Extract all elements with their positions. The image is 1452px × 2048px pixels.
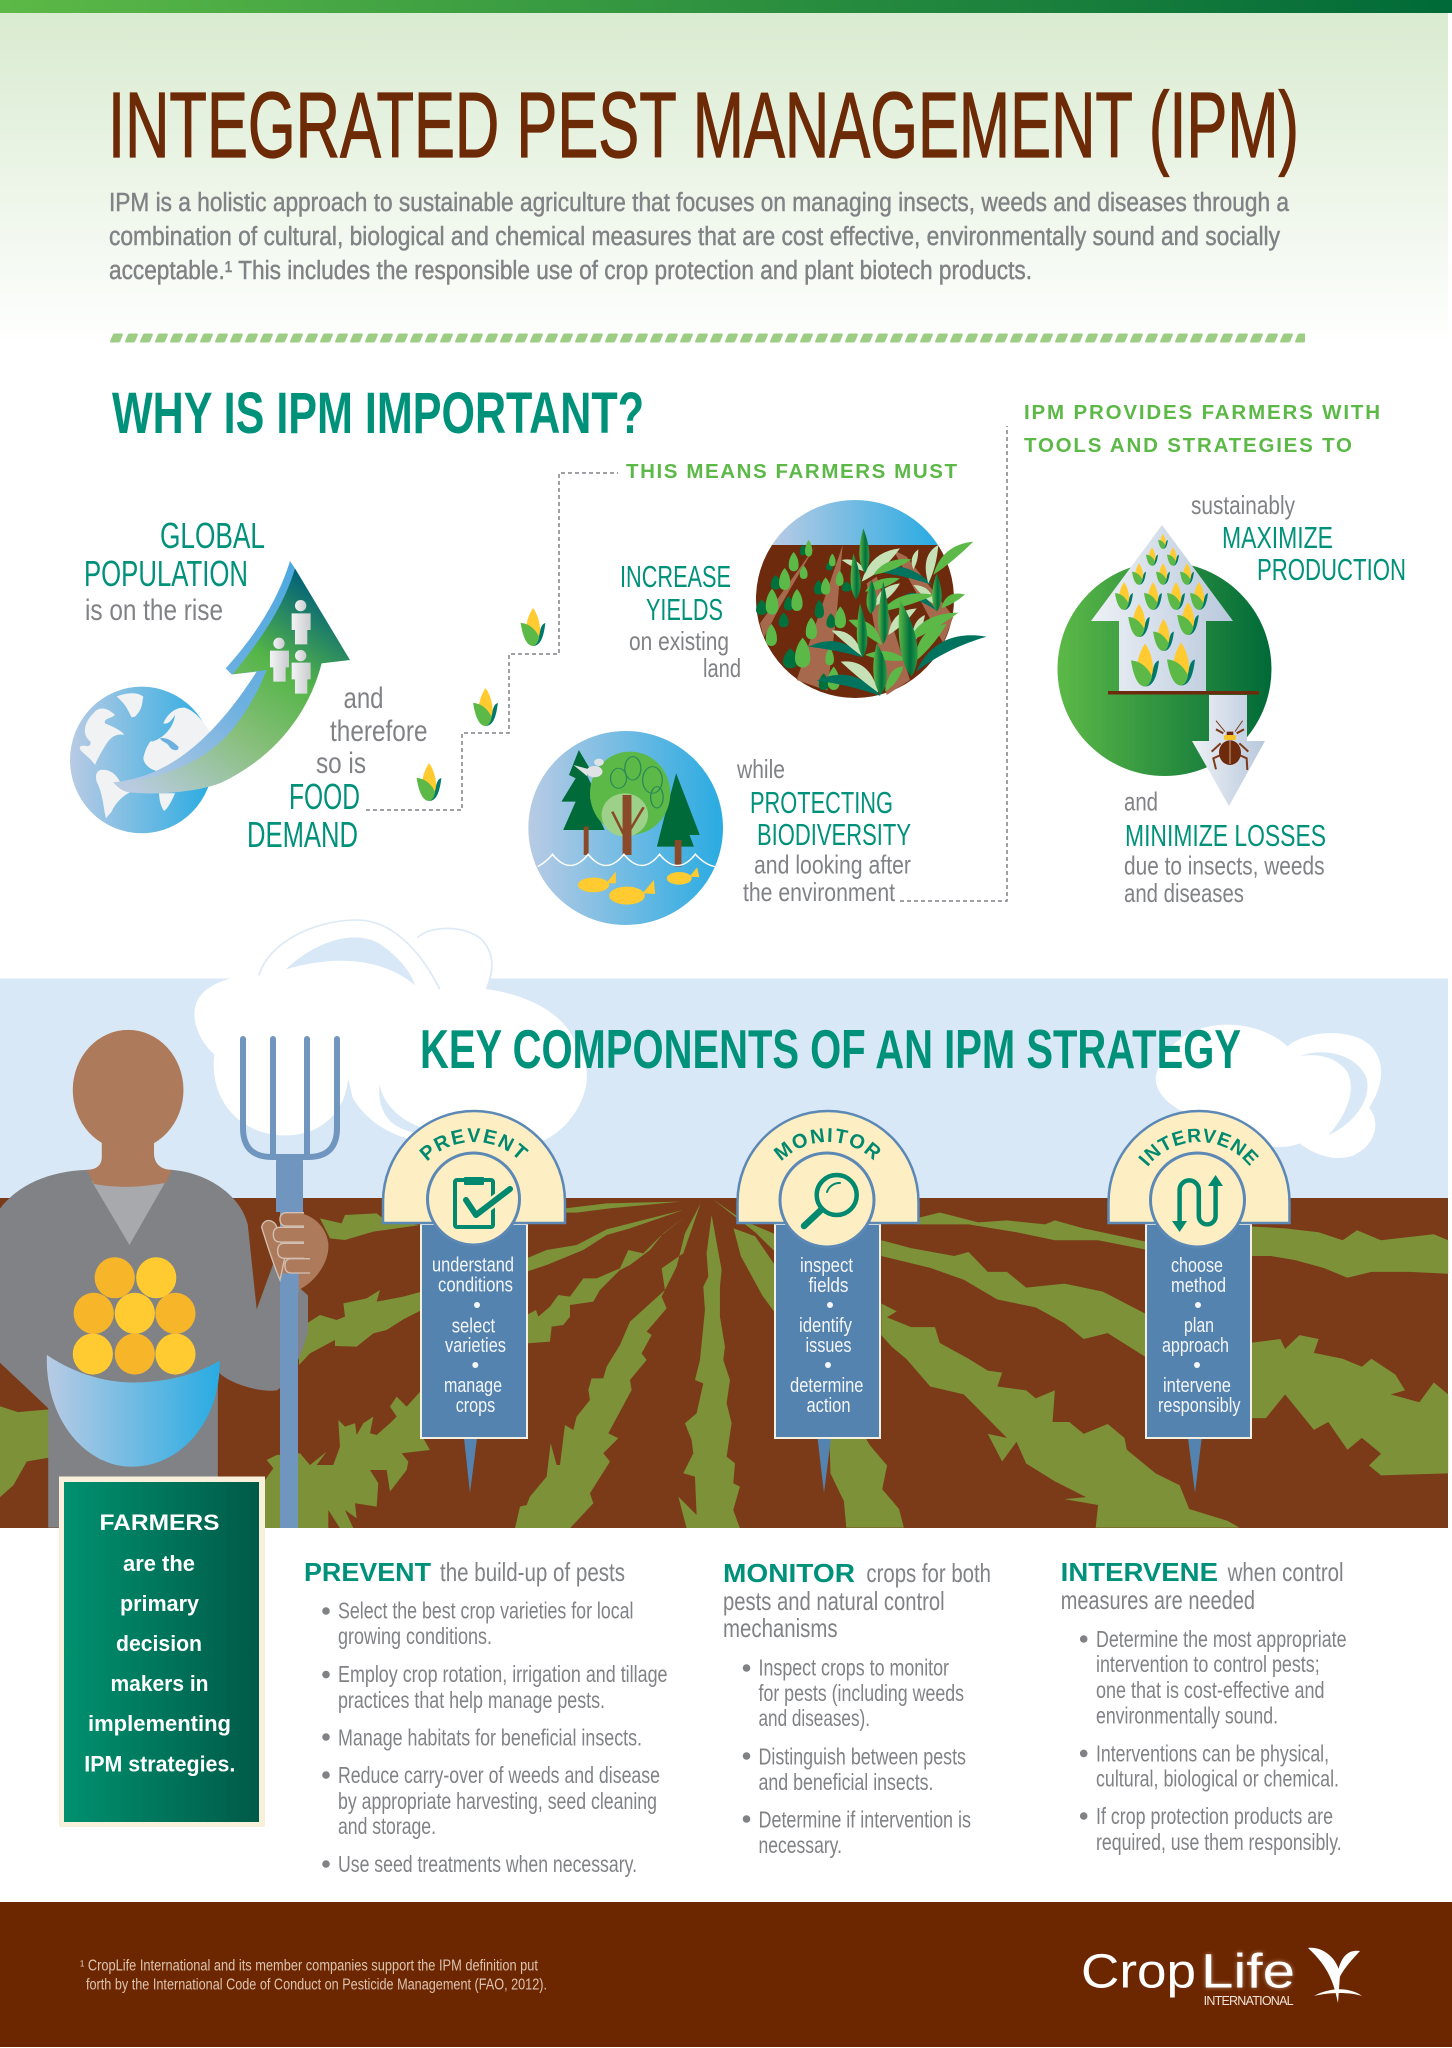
sign text prevent: varieties [445, 1335, 506, 1357]
intro text: IPM is a holistic approach to sustainable agriculture that focuses on managing insects, weeds and diseases through a [109, 189, 1290, 217]
icon: magnifier [804, 1175, 857, 1226]
column: prevent: the build-up of pests [440, 1557, 625, 1587]
heading: IPM provides farmers [1024, 401, 1380, 457]
sign label prevent: PREVENT [419, 1128, 529, 1161]
column: intervene: when control [1227, 1557, 1344, 1587]
sign text prevent: manage [444, 1375, 502, 1397]
dashed stair connector [366, 473, 618, 810]
text: food demand: DEMAND [247, 814, 358, 855]
logo: CropLife International: Life [1201, 1946, 1295, 1999]
intro text [109, 189, 1290, 285]
column: monitor: MONITOR [723, 1558, 855, 1588]
icon: up and down arrows [1172, 1175, 1223, 1232]
column: prevent: practices that help manage pests. [338, 1687, 605, 1713]
column: monitor: and beneficial insects. [758, 1769, 934, 1795]
sign text prevent: understand [432, 1255, 514, 1277]
callout: farmers box: primary [120, 1591, 200, 1616]
column: monitor: Distinguish between pests [758, 1744, 966, 1770]
intro text: acceptable.¹ This includes the responsible use of crop protection and plant biotech products. [109, 257, 1032, 285]
sign text intervene: intervene [1163, 1375, 1231, 1397]
icon: corn 2 [473, 688, 498, 726]
sky band [0, 978, 1448, 1198]
text: protecting biodiversity: the environment [743, 877, 896, 907]
sign text intervene: approach [1162, 1335, 1229, 1357]
icon: farmer hand [262, 1212, 328, 1293]
column: monitor: Inspect crops to monitor [758, 1654, 949, 1680]
farmer figure [0, 1030, 337, 1528]
icon: beetle [1212, 721, 1248, 770]
callout: farmers box: makers in [110, 1671, 208, 1696]
text: minimize losses: and diseases [1124, 878, 1244, 908]
text: protecting biodiversity: BIODIVERSITY [757, 817, 911, 852]
column: intervene: required, use them responsibly. [1096, 1829, 1342, 1855]
column: monitor: necessary. [758, 1832, 842, 1858]
column: intervene: cultural, biological or chemical. [1096, 1766, 1339, 1792]
sign text intervene [1158, 1255, 1240, 1417]
column: monitor: and diseases). [758, 1705, 870, 1731]
column: prevent: and storage. [338, 1813, 436, 1839]
icon: right cloud [1156, 1025, 1381, 1158]
sign text monitor: fields [808, 1275, 848, 1297]
text: food demand: FOOD [289, 776, 360, 817]
callout: farmers box: implementing [88, 1711, 231, 1736]
sign text monitor: issues [806, 1335, 852, 1357]
sign: intervene [1107, 1110, 1291, 1493]
column: intervene: Interventions can be physical, [1096, 1740, 1329, 1766]
callout: farmers box: decision [116, 1631, 202, 1656]
column: intervene: Determine the most appropriate [1096, 1626, 1346, 1652]
column: intervene: environmentally sound. [1096, 1703, 1278, 1729]
icon: clipboard [455, 1178, 510, 1227]
sign: prevent [382, 1110, 566, 1493]
top gradient bar [0, 0, 1452, 13]
callout: farmers box [59, 1476, 265, 1827]
white lower panel [0, 1528, 1452, 1902]
text: global population: is on the rise [85, 594, 223, 627]
column: monitor: pests and natural control [723, 1586, 945, 1616]
icon: pitchfork [243, 1039, 337, 1528]
column: intervene: If crop protection products are [1096, 1803, 1333, 1829]
column: prevent: Employ crop rotation, irrigation and tillage [338, 1661, 668, 1687]
column: prevent: Manage habitats for beneficial insects. [338, 1725, 642, 1751]
column: prevent: PREVENT [304, 1557, 431, 1587]
callout: farmers box: are the [123, 1551, 195, 1576]
column: prevent: Reduce carry-over of weeds and disease [338, 1762, 660, 1788]
text: maximize production: sustainably [1191, 490, 1295, 520]
text: minimize losses: and [1124, 786, 1158, 816]
footer band [0, 1902, 1452, 2047]
text: minimize losses: due to insects, weeds [1124, 850, 1324, 880]
text: global population: GLOBAL [160, 515, 265, 556]
text: food demand: so is [316, 747, 366, 780]
footnote [80, 1958, 547, 1994]
column: intervene: INTERVENE [1061, 1557, 1218, 1587]
column: monitor: crops for both [866, 1558, 991, 1588]
heading: this means farmers must: THIS MEANS FARMERS MUST [626, 460, 957, 483]
sign text intervene: method [1171, 1275, 1226, 1297]
text: minimize losses [1124, 786, 1326, 908]
sign text monitor: identify [799, 1315, 852, 1337]
down arrow [1192, 695, 1265, 806]
column: prevent: Select the best crop varieties for local [338, 1598, 634, 1624]
column: intervene: measures are needed [1061, 1585, 1255, 1615]
column: prevent: by appropriate harvesting, seed cleaning [338, 1788, 657, 1814]
column: intervene: intervention to control pests; [1096, 1651, 1320, 1677]
sign: monitor [736, 1110, 920, 1493]
text: food demand: therefore [330, 715, 428, 748]
heading: IPM provides farmers: TOOLS AND STRATEGIES TO [1024, 434, 1352, 457]
intro text: combination of cultural, biological and chemical measures that are cost effective, environmentally sound and socially [109, 223, 1280, 251]
sign text monitor: determine [790, 1375, 864, 1397]
text: minimize losses: MINIMIZE LOSSES [1125, 818, 1326, 853]
footnote: ¹ CropLife International and its member companies support the IPM definition put [80, 1958, 539, 1974]
dashed connector right [900, 426, 1007, 901]
column: intervene [1061, 1557, 1346, 1855]
sign text intervene: choose [1171, 1255, 1223, 1277]
icon: globe with rising arrow [70, 561, 350, 833]
text: increase yields: INCREASE [620, 559, 731, 594]
column: monitor: for pests (including weeds [758, 1680, 964, 1706]
column: intervene: one that is cost-effective and [1096, 1677, 1324, 1703]
text: protecting biodiversity [736, 754, 911, 907]
text: increase yields: on existing [629, 626, 729, 656]
text: maximize production [1191, 490, 1406, 587]
icon: biodiversity circle [528, 731, 723, 925]
column: monitor: Determine if intervention is [758, 1806, 971, 1832]
text: increase yields: land [703, 653, 741, 683]
sign text monitor: action [806, 1395, 850, 1417]
heading: IPM provides farmers: IPM PROVIDES FARMERS WITH [1024, 401, 1380, 424]
icon: corn 1 [417, 763, 441, 801]
ground band [0, 1198, 1448, 1528]
sign text monitor [790, 1255, 864, 1417]
sign text prevent: select [452, 1315, 496, 1337]
callout: farmers box: IPM strategies. [84, 1752, 235, 1776]
icon: crop field circle [756, 500, 987, 698]
callout: farmers box: FARMERS [100, 1510, 220, 1535]
text: increase yields: YIELDS [646, 592, 723, 627]
text: maximize production: MAXIMIZE [1222, 520, 1333, 555]
logo: CropLife International [1081, 1946, 1362, 2008]
text: protecting biodiversity: while [736, 754, 785, 784]
sign text intervene: plan [1184, 1315, 1214, 1337]
logo: CropLife International: Crop [1081, 1946, 1196, 1999]
sign label intervene: INTERVENE [1138, 1128, 1259, 1166]
column: prevent [304, 1557, 668, 1877]
crop rows right [712, 1199, 1448, 1528]
footnote: forth by the International Code of Conduct on Pesticide Management (FAO, 2012). [86, 1977, 547, 1994]
header background [0, 13, 1448, 348]
leaf divider [109, 333, 1305, 343]
column: prevent: growing conditions. [338, 1623, 492, 1649]
icon: maximize and minimize circle [1058, 525, 1272, 806]
column: prevent: Use seed treatments when necessary. [338, 1851, 637, 1877]
sign text prevent: conditions [438, 1275, 513, 1297]
crop rows left [0, 1202, 740, 1528]
text: food demand: and [344, 682, 384, 715]
logo: CropLife International: INTERNATIONAL [1204, 1994, 1294, 2008]
text: food demand [247, 682, 428, 855]
heading: why is IPM important: WHY IS IPM IMPORTANT? [112, 381, 644, 446]
sign label monitor: MONITOR [773, 1128, 880, 1161]
text: global population: POPULATION [84, 553, 248, 594]
soil line [1108, 691, 1259, 694]
sign text prevent: crops [456, 1395, 495, 1417]
icon: corn 3 [521, 608, 545, 646]
column: monitor: mechanisms [723, 1613, 838, 1643]
sign text monitor: inspect [800, 1255, 853, 1277]
icon: left cloud [194, 920, 587, 1148]
text: global population [84, 515, 265, 627]
sign text intervene: responsibly [1158, 1395, 1240, 1417]
text: protecting biodiversity: and looking after [754, 850, 911, 880]
text: increase yields [620, 559, 741, 683]
text: protecting biodiversity: PROTECTING [750, 785, 893, 820]
sign text prevent [432, 1255, 514, 1417]
up arrow with corn [1091, 525, 1233, 691]
column: monitor [723, 1558, 991, 1858]
